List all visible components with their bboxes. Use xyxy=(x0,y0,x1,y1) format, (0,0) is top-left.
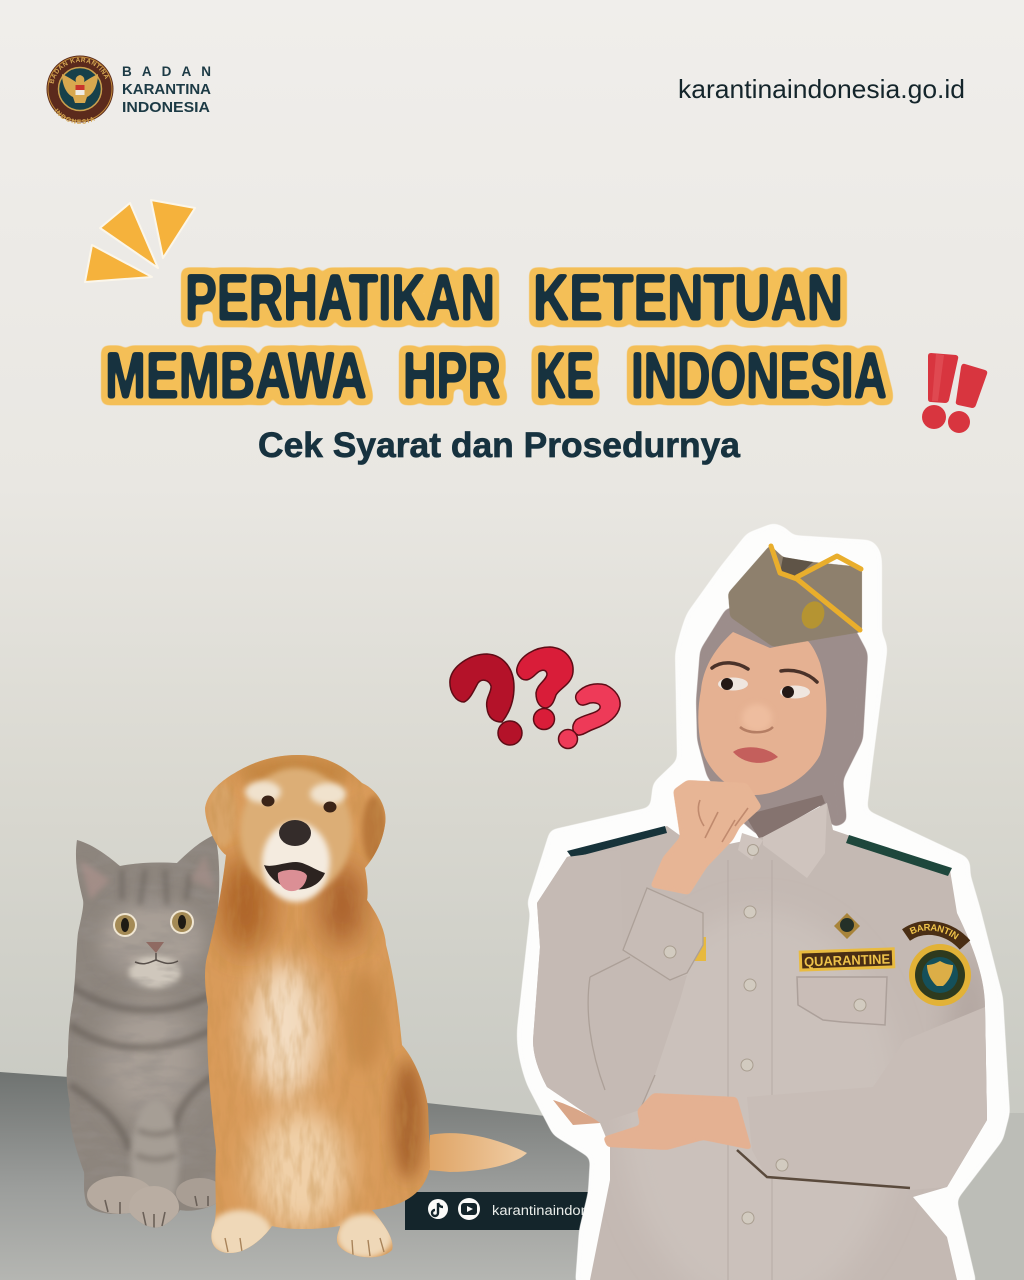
white sticker outline xyxy=(517,523,1010,1280)
hijab xyxy=(696,607,868,837)
sleeve and cuff lines xyxy=(737,1150,910,1188)
shirt xyxy=(533,803,987,1280)
quarantine name patch: QUARANTINE xyxy=(804,951,890,969)
nose and lips xyxy=(733,704,778,763)
hijab neck fold xyxy=(745,795,825,840)
icon: red question marks xyxy=(450,647,620,748)
background floor xyxy=(0,1072,1024,1280)
thinking hand xyxy=(650,780,762,895)
name tag behind cuff xyxy=(690,937,706,961)
logo: Badan Karantina Indonesia: KARANTINA xyxy=(122,81,211,98)
Barantin arc patch: BARANTIN xyxy=(910,924,959,940)
shirt collar xyxy=(738,803,827,878)
face xyxy=(698,632,826,795)
logo: Badan Karantina Indonesia xyxy=(46,56,211,124)
title: KE xyxy=(536,338,594,412)
website address: karantinaindonesia.go.id xyxy=(678,74,965,104)
illustration: grey tabby cat xyxy=(66,836,220,1228)
social media bar: karantinaindonesia.go.id xyxy=(492,1203,652,1218)
illustration: quarantine officer with sticker outline xyxy=(516,524,1010,1280)
sleeve cuff xyxy=(623,888,703,980)
eyebrows xyxy=(712,663,817,682)
quarantine name patch xyxy=(799,947,895,972)
icon: red exclamation marks xyxy=(922,353,987,433)
crossed forearm and hand xyxy=(553,1093,752,1150)
subtitle: Cek Syarat dan Prosedurnya xyxy=(258,426,741,465)
social media bar xyxy=(405,1192,652,1230)
Badan Karantina arm emblem xyxy=(909,944,971,1006)
logo: Badan Karantina Indonesia: BADAN KARANTINA xyxy=(49,58,108,84)
title: MEMBAWA xyxy=(105,338,367,412)
illustration: golden retriever xyxy=(200,750,527,1260)
thinking arm sleeve xyxy=(533,850,687,1123)
shirt buttons xyxy=(664,844,866,1224)
icon: TikTok and YouTube badges xyxy=(428,1198,480,1220)
right sleeve xyxy=(747,1007,987,1190)
right shoulder board xyxy=(846,835,952,876)
sleeve crease xyxy=(588,957,655,1110)
logo: Badan Karantina Indonesia: INDONESIA xyxy=(54,108,95,124)
shirt pocket xyxy=(797,977,887,1025)
left shoulder board xyxy=(567,826,667,858)
title: INDONESIA xyxy=(631,338,887,412)
icon: yellow burst triangles xyxy=(85,200,195,282)
title: PERHATIKAN xyxy=(185,260,495,334)
logo: Badan Karantina Indonesia: BADAN xyxy=(122,64,211,79)
title: KETENTUAN xyxy=(533,260,843,334)
emblem star xyxy=(834,913,860,939)
garrison cap xyxy=(728,545,862,647)
Barantin arc patch xyxy=(902,920,970,950)
eyes xyxy=(718,678,810,698)
logo: Badan Karantina Indonesia: INDONESIA xyxy=(122,99,210,116)
title xyxy=(105,260,887,412)
title: HPR xyxy=(403,338,501,412)
left arm patch xyxy=(547,896,600,922)
